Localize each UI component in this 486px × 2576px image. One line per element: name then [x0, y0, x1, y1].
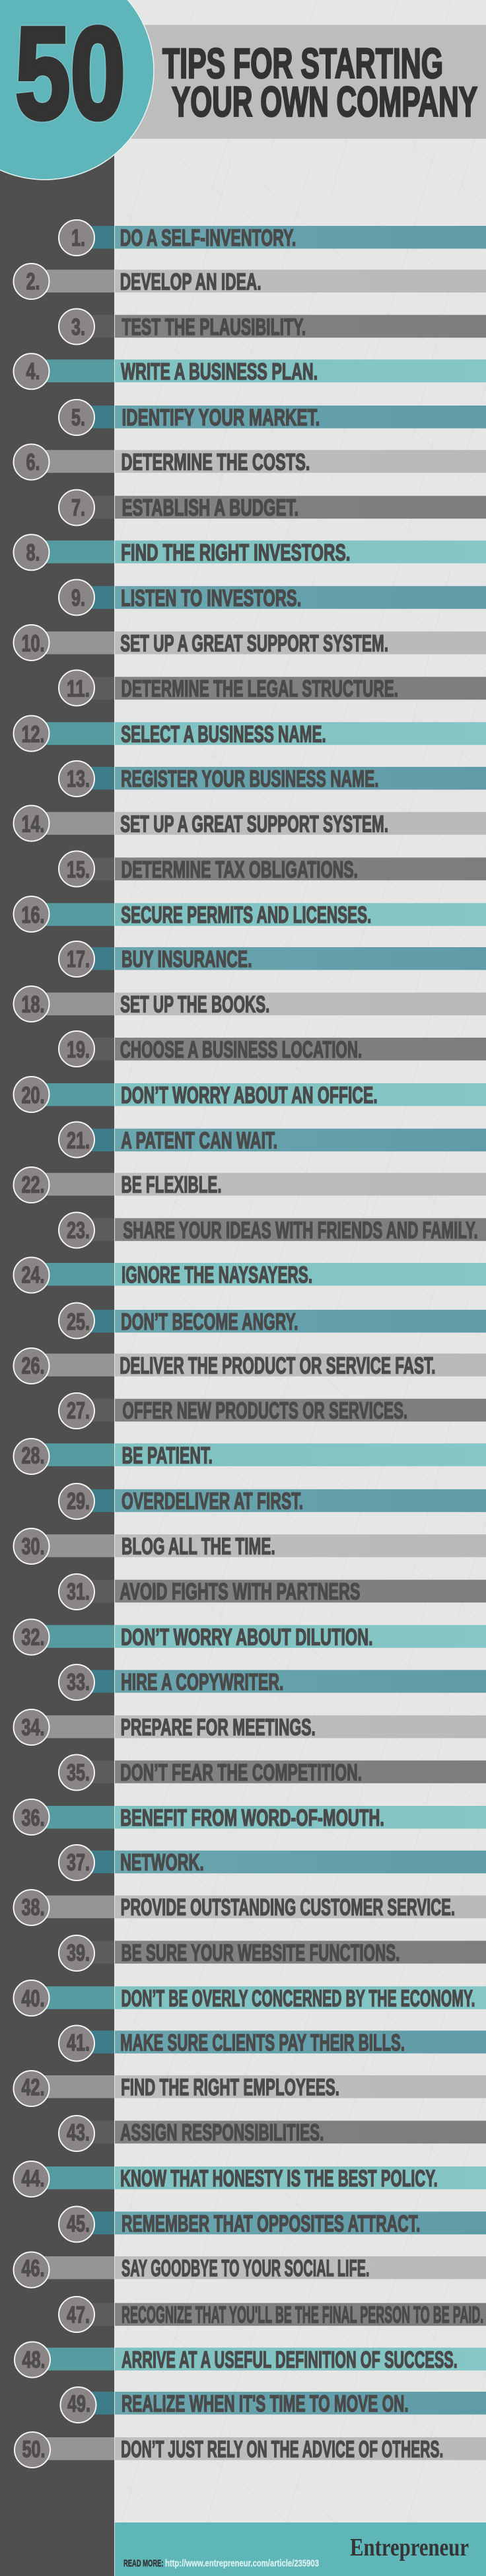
number badge: 8.	[26, 540, 40, 565]
bar	[77, 586, 486, 609]
number badge	[59, 490, 94, 526]
number badge: 26.	[21, 1353, 45, 1378]
title	[162, 40, 477, 125]
number badge: 31.	[67, 1579, 90, 1605]
number badge	[59, 670, 94, 705]
tip 32	[13, 1620, 486, 1655]
number badge	[13, 1348, 49, 1384]
bar	[77, 1489, 486, 1512]
number badge: 44.	[21, 2166, 45, 2192]
number badge	[59, 761, 94, 797]
tip 37	[59, 1845, 486, 1880]
tip 11	[59, 670, 486, 705]
bar	[32, 1625, 486, 1648]
number badge: 4.	[26, 359, 40, 384]
tip 41	[59, 2025, 486, 2061]
tip text: DEVELOP AN IDEA.	[120, 269, 261, 295]
tip 24	[13, 1258, 486, 1293]
number badge	[13, 1980, 49, 2016]
number badge: 46.	[21, 2256, 45, 2281]
number badge: 42.	[21, 2075, 45, 2100]
tip 4	[13, 353, 486, 389]
tip 28	[13, 1439, 486, 1474]
number badge	[59, 1213, 94, 1248]
number badge	[59, 2025, 94, 2061]
tip 9	[59, 580, 486, 616]
number badge: 36.	[21, 1805, 45, 1831]
bar	[77, 406, 486, 428]
tip 31	[59, 1574, 486, 1610]
bar	[32, 269, 486, 293]
bar	[77, 767, 486, 790]
bar	[77, 2030, 486, 2054]
tip text: AVOID FIGHTS WITH PARTNERS	[120, 1579, 360, 1605]
number badge: 40.	[21, 1986, 45, 2011]
tip text: TEST THE PLAUSIBILITY.	[122, 314, 306, 340]
number badge: 11.	[67, 676, 90, 702]
number badge	[61, 2387, 96, 2423]
tip 10	[13, 625, 486, 661]
bar	[32, 1263, 486, 1285]
number badge: 48.	[22, 2347, 45, 2373]
tip 6	[13, 444, 486, 480]
number badge: 9.	[71, 585, 85, 611]
tip text: BE PATIENT.	[122, 1443, 213, 1468]
tip 1	[59, 220, 486, 256]
number badge	[59, 400, 94, 435]
number badge	[13, 1620, 49, 1655]
tip 39	[59, 1935, 486, 1971]
tip text: FIND THE RIGHT EMPLOYEES.	[121, 2075, 339, 2100]
bar	[32, 359, 486, 382]
number badge	[59, 2116, 94, 2151]
number badge: 37.	[67, 1850, 90, 1876]
tip text: SET UP THE BOOKS.	[120, 992, 269, 1018]
bar	[32, 1083, 486, 1106]
bar	[32, 540, 486, 563]
bar	[77, 947, 486, 970]
number badge	[59, 1574, 94, 1610]
number badge: 25.	[67, 1309, 90, 1335]
bar	[77, 1129, 486, 1151]
bar	[32, 1715, 486, 1738]
tip text: DETERMINE TAX OBLIGATIONS.	[122, 857, 358, 882]
tip 49	[61, 2387, 486, 2423]
number badge: 45.	[67, 2211, 90, 2236]
tip 15	[59, 851, 486, 886]
number badge	[13, 444, 49, 480]
tip text: ASSIGN RESPONSIBILITIES.	[120, 2120, 324, 2146]
bar	[32, 812, 486, 835]
tip 43	[59, 2116, 486, 2151]
footer panel	[115, 2522, 486, 2576]
number badge	[59, 1754, 94, 1790]
tip 5	[59, 400, 486, 435]
number badge: 23.	[67, 1217, 90, 1243]
tip 42	[13, 2071, 486, 2106]
number badge: 5.	[71, 405, 85, 431]
number badge	[13, 264, 49, 299]
header band	[114, 25, 486, 139]
bar	[32, 1353, 486, 1377]
number badge	[15, 2432, 50, 2468]
tip 21	[59, 1122, 486, 1157]
number badge: 17.	[67, 947, 90, 972]
bar	[77, 677, 486, 699]
tip 50	[15, 2432, 486, 2468]
bar	[32, 631, 486, 654]
number badge: 29.	[67, 1489, 90, 1515]
left sidebar	[0, 0, 114, 2576]
number badge: 16.	[21, 902, 45, 928]
bar	[32, 2347, 486, 2371]
teal header circle	[0, 0, 154, 180]
number badge: 33.	[67, 1669, 90, 1695]
number badge: 50.	[22, 2437, 45, 2462]
number badge: 35.	[67, 1760, 90, 1785]
read more link: http://www.entrepreneur.com/article/235903	[165, 2558, 319, 2569]
number badge	[13, 806, 49, 841]
tip text: SELECT A BUSINESS NAME.	[121, 721, 326, 747]
bar	[32, 2166, 486, 2189]
tip 36	[13, 1799, 486, 1835]
number badge	[13, 1077, 49, 1112]
number badge	[13, 1799, 49, 1835]
tip 30	[13, 1528, 486, 1564]
tip text: ESTABLISH A BUDGET.	[122, 495, 298, 521]
tip 7	[59, 490, 486, 526]
bar	[77, 1310, 486, 1333]
bar	[32, 903, 486, 926]
bar	[77, 1399, 486, 1421]
bar	[77, 857, 486, 880]
tip 34	[13, 1709, 486, 1745]
bar	[77, 2211, 486, 2235]
number badge: 2.	[26, 269, 40, 295]
number badge: 13.	[67, 766, 90, 792]
bar	[77, 226, 486, 248]
number badge	[59, 851, 94, 886]
number badge: 10.	[21, 631, 45, 657]
big number 50: 50	[15, 0, 125, 146]
tip 3	[59, 309, 486, 345]
tip 13	[59, 761, 486, 797]
bar	[32, 1896, 486, 1918]
number badge: 19.	[67, 1037, 90, 1063]
bar	[77, 1941, 486, 1964]
number badge: 22.	[21, 1172, 45, 1198]
read more link: READ MORE:	[123, 2558, 164, 2569]
number badge	[13, 1439, 49, 1474]
bar	[77, 2392, 486, 2415]
number badge: 43.	[67, 2120, 90, 2146]
tip 17	[59, 941, 486, 977]
number badge	[59, 309, 94, 345]
tip 27	[59, 1393, 486, 1429]
number badge: 34.	[21, 1715, 45, 1740]
tip text: NETWORK.	[120, 1850, 204, 1876]
bar	[32, 722, 486, 745]
bar	[77, 1851, 486, 1873]
number badge	[13, 2252, 49, 2288]
tip text: DON’T BECOME ANGRY.	[121, 1309, 298, 1335]
number badge: 15.	[67, 857, 90, 882]
number badge: 1.	[71, 225, 85, 251]
number badge	[59, 1031, 94, 1067]
number badge	[13, 1167, 49, 1203]
tip 48	[15, 2342, 486, 2378]
bar	[32, 1806, 486, 1828]
number badge: 47.	[67, 2303, 90, 2328]
number badge: 18.	[21, 992, 45, 1018]
tip 23	[59, 1213, 486, 1248]
number badge	[13, 534, 49, 570]
number badge	[13, 1709, 49, 1745]
tip text: IGNORE THE NAYSAYERS.	[122, 1262, 312, 1288]
number badge: 39.	[67, 1940, 90, 1966]
tip 45	[59, 2206, 486, 2242]
bar	[32, 450, 486, 473]
number badge: 28.	[21, 1443, 45, 1468]
number badge	[59, 1935, 94, 1971]
number badge	[13, 896, 49, 932]
tip 26	[13, 1348, 486, 1384]
number badge	[13, 353, 49, 389]
number badge	[59, 1393, 94, 1429]
number badge	[59, 1303, 94, 1338]
tip text: DON’T FEAR THE COMPETITION.	[120, 1760, 362, 1785]
tip 8	[13, 534, 486, 570]
number badge	[59, 1484, 94, 1519]
number badge	[13, 2161, 49, 2197]
number badge	[13, 1890, 49, 1925]
number badge	[59, 2297, 94, 2332]
number badge	[13, 1528, 49, 1564]
bar	[77, 1038, 486, 1061]
tip 12	[13, 716, 486, 752]
number badge	[59, 2206, 94, 2242]
tip text: A PATENT CAN WAIT.	[121, 1128, 277, 1154]
tip 19	[59, 1031, 486, 1067]
tip text: BUY INSURANCE.	[122, 947, 252, 972]
tip 46	[13, 2252, 486, 2288]
tip 16	[13, 896, 486, 932]
number badge	[59, 1664, 94, 1700]
number badge: 24.	[21, 1262, 45, 1288]
number badge	[59, 1845, 94, 1880]
read more link	[123, 2558, 319, 2569]
bar	[77, 1670, 486, 1693]
bar	[77, 1580, 486, 1602]
number badge	[59, 580, 94, 616]
number badge: 30.	[21, 1534, 45, 1559]
bar	[77, 496, 486, 519]
number badge: 41.	[67, 2030, 90, 2056]
number badge	[59, 1122, 94, 1157]
number badge	[59, 220, 94, 256]
number badge	[13, 1258, 49, 1293]
tip 44	[13, 2161, 486, 2197]
tip 25	[59, 1303, 486, 1338]
tip 38	[13, 1890, 486, 1925]
tip text: HIRE A COPYWRITER.	[121, 1669, 284, 1695]
number badge: 21.	[67, 1128, 90, 1154]
tip 14	[13, 806, 486, 841]
bar	[77, 2303, 486, 2326]
number badge: 38.	[21, 1895, 45, 1921]
number badge: 14.	[21, 811, 45, 837]
tip text: FIND THE RIGHT INVESTORS.	[121, 540, 350, 565]
bar	[32, 1173, 486, 1196]
number badge: 27.	[67, 1398, 90, 1424]
tip text: DO A SELF-INVENTORY.	[120, 225, 296, 251]
bar	[32, 1534, 486, 1557]
bar	[77, 2121, 486, 2143]
number badge	[15, 2342, 50, 2378]
number badge: 12.	[21, 721, 45, 747]
bar	[32, 1443, 486, 1466]
number badge	[13, 2071, 49, 2106]
number badge: 49.	[67, 2391, 90, 2417]
tip text: WRITE A BUSINESS PLAN.	[121, 359, 318, 384]
number badge: 7.	[71, 495, 85, 521]
number badge	[59, 941, 94, 977]
number badge	[13, 986, 49, 1022]
bar	[32, 2075, 486, 2098]
tip 35	[59, 1754, 486, 1790]
bar	[77, 1218, 486, 1241]
bar	[32, 993, 486, 1015]
tip 18	[13, 986, 486, 1022]
number badge: 32.	[21, 1624, 45, 1650]
number badge: 20.	[21, 1083, 45, 1108]
tip text: LISTEN TO INVESTORS.	[121, 585, 301, 611]
tip text: BLOG ALL THE TIME.	[122, 1534, 275, 1559]
tip 47	[59, 2297, 486, 2332]
bar	[32, 2437, 486, 2460]
number badge	[13, 625, 49, 661]
tip text: OVERDELIVER AT FIRST.	[122, 1489, 303, 1515]
tip 2	[13, 264, 486, 299]
tip text: DETERMINE THE COSTS.	[122, 449, 310, 475]
bar	[77, 315, 486, 338]
number badge: 6.	[26, 449, 40, 475]
bar	[32, 1986, 486, 2009]
bar	[32, 2256, 486, 2279]
number badge	[13, 716, 49, 752]
tip 40	[13, 1980, 486, 2016]
tip text: IDENTIFY YOUR MARKET.	[122, 405, 320, 431]
tip text: DON’T WORRY ABOUT DILUTION.	[121, 1624, 373, 1650]
tip 22	[13, 1167, 486, 1203]
tip 33	[59, 1664, 486, 1700]
tip text: BE FLEXIBLE.	[122, 1172, 222, 1198]
tip 29	[59, 1484, 486, 1519]
tip text: PREPARE FOR MEETINGS.	[121, 1715, 316, 1740]
number badge: 3.	[71, 314, 85, 340]
tip 20	[13, 1077, 486, 1112]
bar	[77, 1760, 486, 1783]
